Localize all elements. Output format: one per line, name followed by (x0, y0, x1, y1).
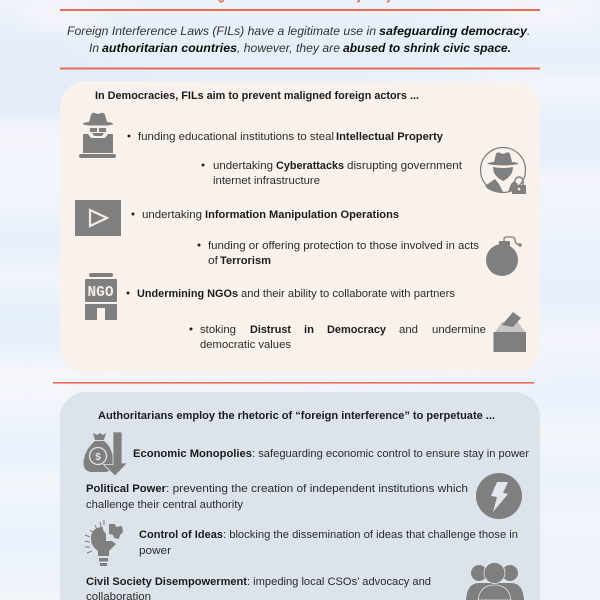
bullet 4: funding or offering protection to those involved in acts (208, 240, 480, 252)
icon: lightbulb puzzle (85, 520, 123, 566)
item: economic monopolies: Economic Monopolies (133, 448, 252, 460)
top divider (60, 9, 540, 11)
icon: ballot box (494, 312, 526, 352)
bullet 1: funding educational institutions to steal (138, 131, 334, 143)
bullet 6: Distrust (250, 324, 291, 336)
icon: money bag with down arrow (83, 432, 128, 476)
item: economic monopolies: : safeguarding economic control to ensure stay in power (252, 448, 529, 460)
bullet 6: undermine (432, 324, 486, 336)
item: political power: Political Power (86, 483, 167, 495)
item: civil society disempowerment: Civil Society Disempowerment (86, 576, 247, 588)
item: control of ideas: : blocking the dissemination of ideas that challenge those in (223, 529, 518, 541)
bullet 2: Cyberattacks (276, 160, 344, 172)
item: political power: challenge their central authority (86, 499, 244, 511)
icon: bomb (486, 237, 522, 276)
item: political power: : preventing the creation of independent institutions which (166, 483, 468, 495)
item: political power (86, 483, 468, 511)
heading: democracies: In Democracies, FILs aim to prevent maligned foreign actors ... (95, 90, 419, 102)
item: civil society disempowerment (86, 576, 431, 600)
bullet 2 (202, 160, 462, 187)
bullet 5: Undermining NGOs (137, 288, 238, 300)
section divider (53, 382, 534, 384)
bullet 5 (126, 288, 455, 300)
item: economic monopolies (133, 448, 529, 460)
intro text: . (527, 24, 530, 38)
icon: lightning bolt circle (476, 473, 522, 519)
bullet 3: Information Manipulation Operations (205, 209, 399, 221)
bullet 2: undertaking (213, 160, 273, 172)
item: control of ideas: power (139, 545, 171, 557)
icon: spy at laptop (79, 113, 116, 158)
bullet 6 (190, 324, 486, 351)
bullet 1: Intellectual Property (336, 131, 444, 143)
intro text: Foreign Interference Laws (FILs) have a legitimate use in (67, 24, 376, 38)
heading: authoritarians: Authoritarians employ the rhetoric of “foreign interference” to perpetuate ... (98, 410, 495, 422)
bullet 6: stoking (200, 324, 236, 336)
bullet 2: internet infrastructure (213, 175, 320, 187)
bullet 6: Democracy (327, 324, 387, 336)
bullet 6: and (399, 324, 418, 336)
item: control of ideas: Control of Ideas (139, 529, 223, 541)
second divider (60, 68, 540, 70)
bullet 6: democratic values (200, 339, 292, 351)
icon: NGO building (85, 273, 117, 320)
bullet 4: Terrorism (220, 255, 271, 267)
item: civil society disempowerment: : impeding local CSOs’ advocacy and (247, 576, 431, 588)
intro text: authoritarian countries (102, 41, 237, 55)
intro text: abused to shrink civic space. (343, 41, 511, 55)
icon: video play box (75, 200, 121, 236)
panel: democracies (60, 81, 540, 373)
bullet 5: and their ability to collaborate with partners (241, 288, 455, 300)
bullet 4 (198, 240, 480, 267)
bullet 1 (128, 131, 444, 143)
panel: authoritarians (60, 392, 540, 600)
item: control of ideas (139, 529, 518, 557)
bullet 6: in (304, 324, 314, 336)
bullet 4: of (208, 255, 219, 267)
icon: hacker with padlock (480, 148, 526, 194)
background: sky with clouds (0, 37, 244, 112)
intro text: In (89, 41, 99, 55)
icon: money bag with down arrow: $ (95, 452, 101, 463)
intro text: , however, they are (237, 41, 340, 55)
bullet 3: undertaking (142, 209, 202, 221)
icon: NGO building: NGO (88, 284, 114, 301)
intro text (67, 24, 530, 55)
icon: group of people (466, 562, 524, 600)
intro text: safeguarding democracy (379, 24, 528, 38)
bullet 2: disrupting government (347, 160, 462, 172)
